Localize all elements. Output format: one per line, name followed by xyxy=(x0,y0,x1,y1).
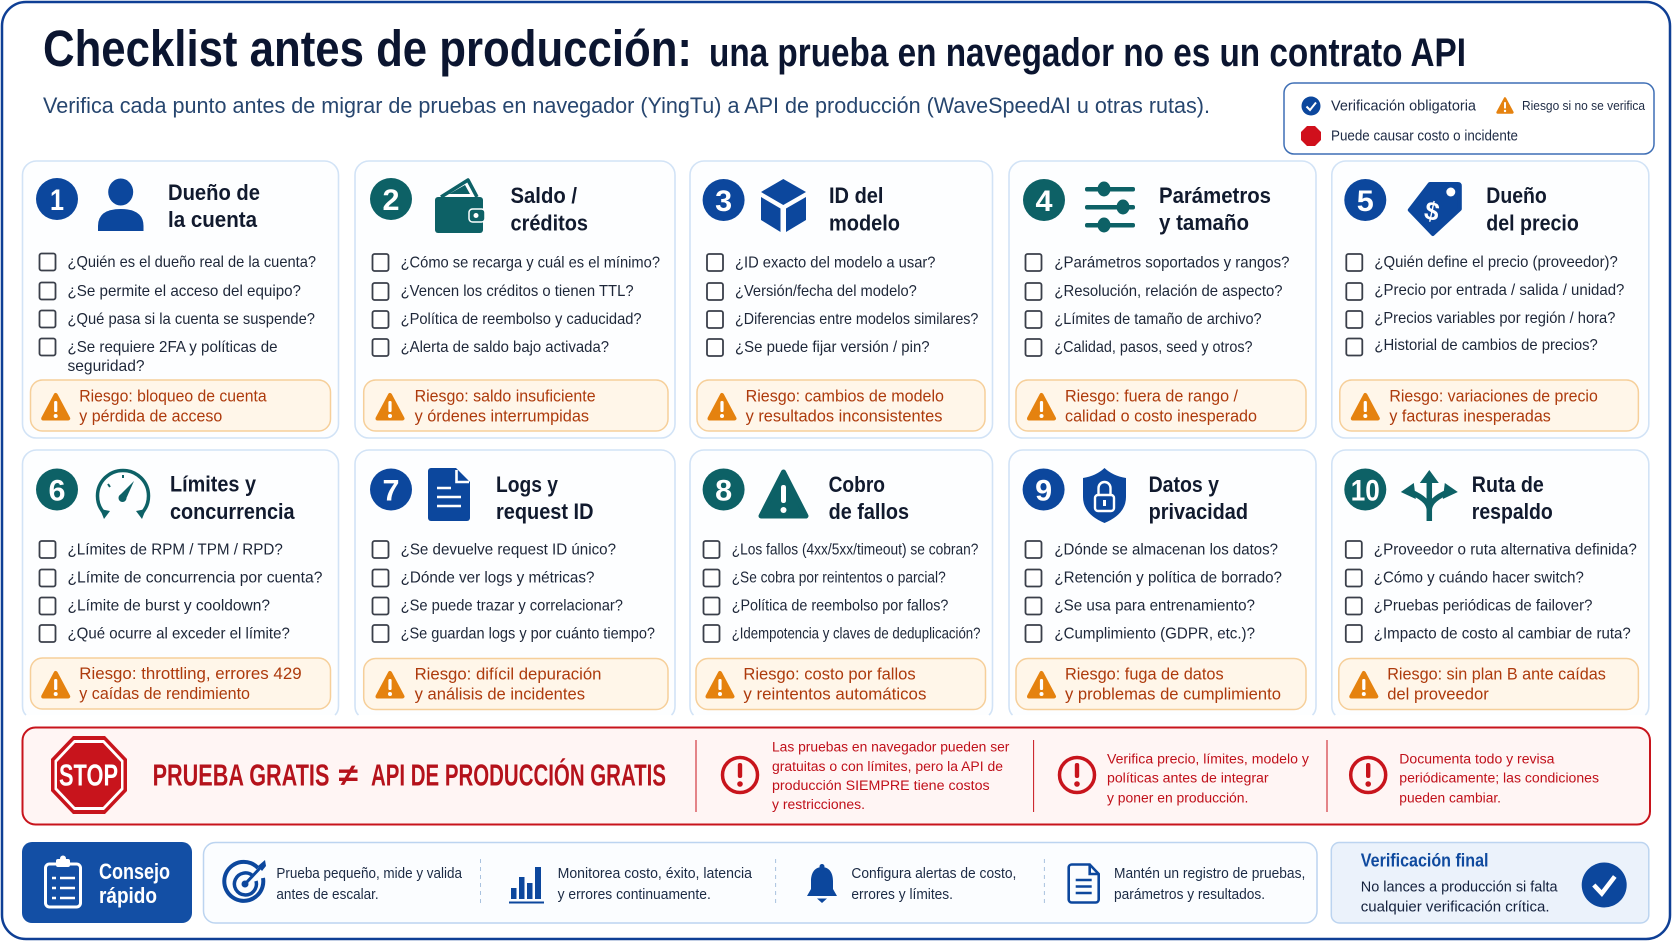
heading: Ruta de xyxy=(1472,472,1544,497)
heading: ID del xyxy=(829,183,884,208)
checklist: ¿Se permite el acceso del equipo? xyxy=(68,283,301,300)
risk callout: Riesgo: variaciones de precio xyxy=(1389,388,1598,406)
warning 2 xyxy=(1033,740,1310,812)
heading xyxy=(1149,472,1248,524)
risk callout xyxy=(364,380,668,431)
heading: concurrencia xyxy=(170,499,295,524)
checklist: ¿Política de reembolso por fallos? xyxy=(732,598,948,615)
title: Checklist antes de producción: xyxy=(43,20,692,77)
checklist: ¿Se guardan logs y por cuánto tiempo? xyxy=(401,625,655,642)
icon: final check xyxy=(1582,862,1627,908)
icon: risk xyxy=(1498,98,1512,112)
risk callout: y pérdida de acceso xyxy=(79,408,222,426)
panel: quick tip label xyxy=(22,842,192,923)
checklist xyxy=(1026,541,1282,642)
badge 7: 7 xyxy=(382,474,400,508)
heading: Dueño xyxy=(1486,183,1547,208)
heading xyxy=(496,472,594,524)
warning 1 xyxy=(696,740,1010,813)
warning 3: periódicamente; las condiciones xyxy=(1399,771,1599,787)
tip 1 xyxy=(224,860,463,903)
heading: la cuenta xyxy=(168,207,257,232)
risk callout xyxy=(1340,380,1638,431)
panel: warning banner xyxy=(22,728,1650,824)
badge 2 xyxy=(370,178,412,220)
panel: card 6 xyxy=(22,450,338,715)
label text: Consejo xyxy=(99,859,170,884)
warning 1: Las pruebas en navegador pueden ser xyxy=(772,740,1010,756)
heading xyxy=(170,472,295,524)
badge 4 xyxy=(1023,179,1065,221)
heading: y tamaño xyxy=(1159,210,1249,235)
checklist xyxy=(704,541,981,642)
badge 1: 1 xyxy=(50,184,64,217)
heading: Datos y xyxy=(1149,472,1219,497)
checklist: ¿Se usa para entrenamiento? xyxy=(1054,598,1255,615)
warning 3: pueden cambiar. xyxy=(1399,790,1501,806)
checklist: ¿Vencen los créditos o tienen TTL? xyxy=(401,283,634,300)
icon: stop sign xyxy=(51,736,127,814)
legend: incident: Puede causar costo o incidente xyxy=(1331,128,1518,144)
heading: Logs y xyxy=(496,472,558,497)
risk callout: Riesgo: fuga de datos xyxy=(1065,666,1224,684)
warning 3: Documenta todo y revisa xyxy=(1399,751,1555,767)
badge 4: 4 xyxy=(1036,185,1053,218)
heading: del precio xyxy=(1486,210,1579,236)
warning 1: gratuitas o con límites, pero la API de xyxy=(772,759,1003,775)
tip 4: Mantén un registro de pruebas, xyxy=(1114,866,1305,882)
risk callout xyxy=(697,380,985,431)
badge 8: 8 xyxy=(715,474,732,508)
checklist: ¿Dónde ver logs y métricas? xyxy=(401,570,595,587)
icon: stop sign: STOP xyxy=(59,758,118,793)
checklist: ¿Precio por entrada / salida / unidad? xyxy=(1374,282,1624,299)
checklist xyxy=(372,541,655,642)
risk callout: y resultados inconsistentes xyxy=(746,408,942,426)
checklist: ¿Parámetros soportados y rangos? xyxy=(1054,254,1290,272)
heading xyxy=(829,472,909,524)
icon: cube xyxy=(761,179,806,232)
risk callout: y facturas inesperadas xyxy=(1389,408,1551,426)
banner heading: ≠ xyxy=(338,758,358,793)
checklist: ¿Límites de RPM / TPM / RPD? xyxy=(68,541,283,558)
checklist: ¿Historial de cambios de precios? xyxy=(1374,337,1598,354)
risk callout: y órdenes interrumpidas xyxy=(415,408,589,426)
icon: incident xyxy=(1301,126,1321,146)
badge 10: 10 xyxy=(1351,474,1380,508)
risk callout xyxy=(696,658,986,710)
legend: mandatory: Verificación obligatoria xyxy=(1331,98,1477,114)
checklist: ¿Idempotencia y claves de deduplicación? xyxy=(732,625,981,642)
risk callout xyxy=(30,658,330,709)
heading xyxy=(1486,183,1579,236)
risk callout: y caídas de rendimiento xyxy=(79,685,250,703)
risk callout: Riesgo: sin plan B ante caídas xyxy=(1387,666,1606,684)
heading: Cobro xyxy=(829,472,885,497)
tip 4: parámetros y resultados. xyxy=(1114,887,1265,903)
icon: gauge xyxy=(97,470,148,519)
checklist: ¿Retención y política de borrado? xyxy=(1054,570,1282,587)
badge 3 xyxy=(703,179,745,221)
badge 6: 6 xyxy=(48,474,66,508)
checklist xyxy=(1346,541,1637,642)
risk callout xyxy=(1339,658,1638,710)
badge 7 xyxy=(370,468,412,510)
panel: card 4 xyxy=(1009,161,1316,438)
checklist: ¿Límite de concurrencia por cuenta? xyxy=(68,570,322,587)
title: una prueba en navegador no es un contrato API xyxy=(709,31,1466,75)
panel: card 8 xyxy=(690,450,992,715)
badge 10 xyxy=(1344,468,1386,510)
checklist: ¿Qué ocurre al exceder el límite? xyxy=(68,625,290,642)
checklist: ¿Dónde se almacenan los datos? xyxy=(1054,541,1278,558)
heading xyxy=(1472,472,1553,524)
tip 3: Configura alertas de costo, xyxy=(851,866,1016,882)
panel: card 1 xyxy=(22,161,338,438)
panel: card 3 xyxy=(690,161,992,438)
heading: privacidad xyxy=(1149,499,1248,524)
banner heading: PRUEBA GRATIS xyxy=(153,758,329,793)
tip 2: y errores continuamente. xyxy=(558,887,711,903)
icon: person xyxy=(98,178,144,231)
checklist xyxy=(707,254,978,356)
banner heading xyxy=(153,757,666,793)
checklist: ¿Se requiere 2FA y políticas de xyxy=(68,339,278,356)
tip 3 xyxy=(776,859,1016,907)
risk callout: y análisis de incidentes xyxy=(415,686,585,704)
checklist: ¿Los fallos (4xx/5xx/timeout) se cobran? xyxy=(732,541,978,558)
risk callout: Riesgo: bloqueo de cuenta xyxy=(79,388,267,406)
label text: rápido xyxy=(99,883,157,908)
risk callout xyxy=(1016,658,1306,710)
heading: Límites y xyxy=(170,472,256,497)
title xyxy=(43,20,1466,77)
tip 1: antes de escalar. xyxy=(276,887,379,903)
checklist xyxy=(372,254,660,356)
checklist: ¿Cómo se recarga y cuál es el mínimo? xyxy=(401,254,660,272)
warning 1: producción SIEMPRE tiene costos xyxy=(772,778,990,794)
checklist: ¿Cómo y cuándo hacer switch? xyxy=(1374,570,1584,587)
risk callout xyxy=(364,658,668,710)
icon: route split xyxy=(1401,470,1458,521)
risk callout xyxy=(1016,380,1306,431)
risk callout: Riesgo: throttling, errores 429 xyxy=(79,665,302,683)
checklist: ¿Política de reembolso y caducidad? xyxy=(401,311,642,328)
checklist: ¿Qué pasa si la cuenta se suspende? xyxy=(68,311,315,328)
tip 1: Prueba pequeño, mide y valida xyxy=(276,866,463,882)
checklist xyxy=(1346,254,1624,356)
banner heading: API DE PRODUCCIÓN GRATIS xyxy=(371,757,666,793)
badge 9: 9 xyxy=(1035,474,1052,508)
panel: card 10 xyxy=(1332,450,1649,715)
checklist: ¿Calidad, pasos, seed y otros? xyxy=(1054,339,1253,356)
heading: request ID xyxy=(496,499,594,524)
tip 2: Monitorea costo, éxito, latencia xyxy=(558,866,753,882)
heading: Saldo / xyxy=(510,183,578,208)
heading: de fallos xyxy=(829,499,909,524)
checklist: ¿Se puede fijar versión / pin? xyxy=(735,339,930,356)
badge 6 xyxy=(36,468,78,510)
checklist: ¿Diferencias entre modelos similares? xyxy=(735,311,978,328)
risk callout: Riesgo: costo por fallos xyxy=(743,666,916,684)
final heading: Verificación final xyxy=(1361,851,1488,871)
risk callout: y reintentos automáticos xyxy=(743,686,926,704)
icon: price tag xyxy=(1410,184,1460,234)
risk callout: Riesgo: fuera de rango / xyxy=(1065,388,1238,406)
label text xyxy=(99,859,170,908)
icon: sliders xyxy=(1085,182,1135,232)
legend xyxy=(1284,83,1654,154)
panel: card 9 xyxy=(1009,450,1316,715)
badge 9 xyxy=(1023,468,1065,510)
icon: clipboard xyxy=(46,856,80,907)
warning 2: y poner en producción. xyxy=(1107,790,1248,806)
panel: card 7 xyxy=(355,450,675,715)
checklist: ¿Quién define el precio (proveedor)? xyxy=(1374,254,1618,271)
checklist: ¿Se cobra por reintentos o parcial? xyxy=(732,570,946,587)
checklist: seguridad? xyxy=(68,358,145,375)
checklist: ¿Límites de tamaño de archivo? xyxy=(1054,311,1262,328)
legend: risk: Riesgo si no se verifica xyxy=(1522,98,1646,113)
warning 2: políticas antes de integrar xyxy=(1107,771,1269,787)
checklist: ¿Precios variables por región / hora? xyxy=(1374,310,1615,327)
panel: card 2 xyxy=(355,161,675,438)
warning 1: y restricciones. xyxy=(772,797,865,813)
heading: respaldo xyxy=(1472,499,1553,524)
icon: price tag: $ xyxy=(1422,195,1443,227)
checklist xyxy=(40,254,316,375)
checklist xyxy=(1026,254,1290,356)
checklist: ¿Pruebas periódicas de failover? xyxy=(1374,598,1592,615)
risk callout: Riesgo: cambios de modelo xyxy=(746,388,944,406)
badge 3: 3 xyxy=(715,185,732,218)
risk callout xyxy=(30,380,330,431)
panel: card 5 xyxy=(1332,161,1649,438)
tip 3: errores y límites. xyxy=(851,887,953,903)
subtitle: Verifica cada punto antes de migrar de pruebas en navegador (YingTu) a API de producción (WaveSpeedAI u otras rutas). xyxy=(43,93,1210,118)
heading: créditos xyxy=(510,210,588,236)
checklist: ¿Versión/fecha del modelo? xyxy=(735,283,917,300)
final text xyxy=(1361,879,1558,916)
badge 1 xyxy=(36,178,78,220)
checklist: ¿Resolución, relación de aspecto? xyxy=(1054,283,1283,300)
icon: warning triangle xyxy=(761,472,806,516)
checklist: ¿Alerta de saldo bajo activada? xyxy=(401,339,609,356)
heading: Dueño de xyxy=(168,180,260,205)
warning 3 xyxy=(1326,740,1599,812)
icon: mandatory check xyxy=(1302,96,1320,116)
tip 2 xyxy=(480,859,753,907)
checklist: ¿Quién es el dueño real de la cuenta? xyxy=(68,254,316,271)
risk callout: y problemas de cumplimiento xyxy=(1065,686,1281,704)
checklist: ¿ID exacto del modelo a usar? xyxy=(735,254,936,272)
risk callout: calidad o costo inesperado xyxy=(1065,408,1257,426)
checklist: ¿Se puede trazar y correlacionar? xyxy=(401,598,623,615)
heading xyxy=(168,180,260,232)
checklist: ¿Límite de burst y cooldown? xyxy=(68,598,270,615)
checklist: ¿Proveedor o ruta alternativa definida? xyxy=(1374,541,1637,558)
panel: quick tips xyxy=(204,842,1317,923)
heading xyxy=(1159,183,1271,235)
badge 5: 5 xyxy=(1357,185,1374,218)
icon: shield xyxy=(1083,468,1126,523)
panel: final verification xyxy=(1331,842,1649,923)
heading xyxy=(829,183,900,236)
risk callout: del proveedor xyxy=(1387,686,1489,704)
final text: cualquier verificación crítica. xyxy=(1361,899,1549,916)
heading: modelo xyxy=(829,210,900,236)
checklist: ¿Cumplimiento (GDPR, etc.)? xyxy=(1054,625,1255,642)
checklist: ¿Se devuelve request ID único? xyxy=(401,541,616,558)
risk callout: Riesgo: difícil depuración xyxy=(415,666,602,684)
checklist xyxy=(40,541,322,642)
heading: Parámetros xyxy=(1159,183,1271,208)
risk callout: Riesgo: saldo insuficiente xyxy=(415,388,596,406)
heading xyxy=(510,183,588,236)
icon: wallet xyxy=(435,180,485,233)
badge 5 xyxy=(1344,179,1386,221)
checklist: ¿Impacto de costo al cambiar de ruta? xyxy=(1374,625,1631,642)
tip 4 xyxy=(1044,859,1305,907)
badge 8 xyxy=(703,468,745,510)
badge 2: 2 xyxy=(382,184,400,217)
final text: No lances a producción si falta xyxy=(1361,879,1558,896)
icon: document xyxy=(428,468,470,521)
warning 2: Verifica precio, límites, modelo y xyxy=(1107,751,1310,767)
